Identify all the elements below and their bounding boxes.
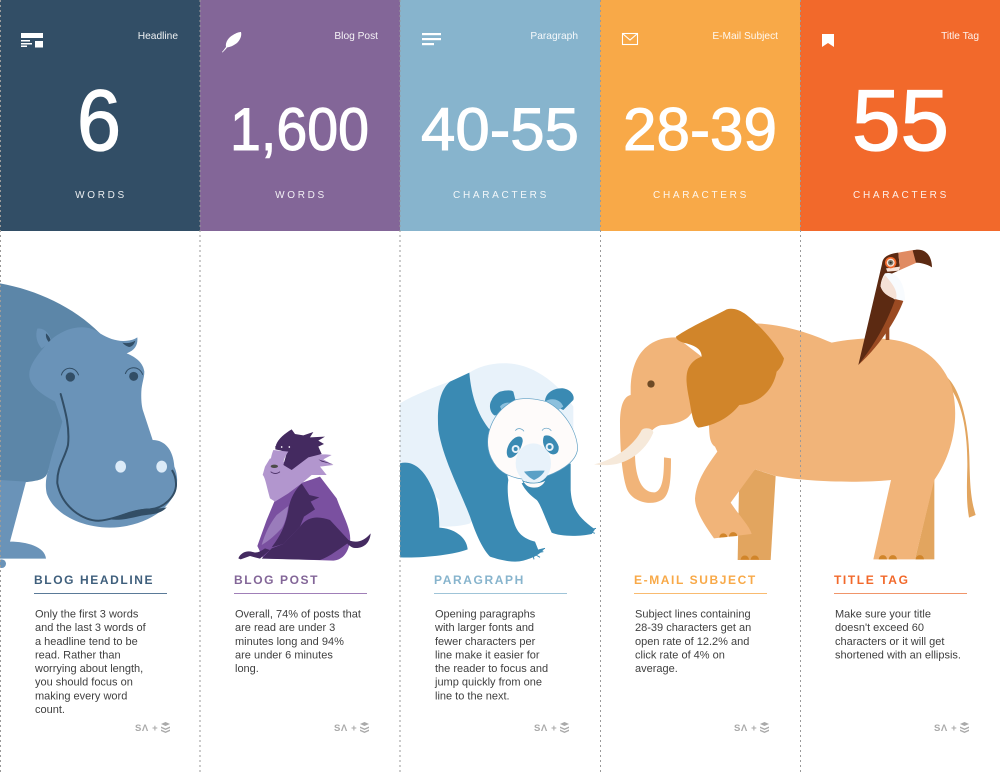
label: e-mail subject: E-Mail Subject	[712, 31, 778, 42]
heading: paragraph: PARAGRAPH	[434, 573, 525, 587]
body: paragraph: fewer characters per	[435, 636, 536, 648]
credit: column 1	[135, 722, 170, 734]
body: blog post: minutes long and 94%	[235, 636, 344, 648]
body: blog headline: and the last 3 words of	[35, 622, 147, 634]
body: blog headline: Only the first 3 words	[35, 608, 139, 620]
icon: bookmark	[822, 34, 834, 47]
body: e-mail subject: 28-39 characters get an	[635, 622, 751, 634]
number: 6: 6	[77, 73, 121, 169]
number: 1,600: 1,600	[230, 96, 369, 163]
panel: e-mail subject header	[600, 0, 800, 231]
credit: column 2: SΛ +	[334, 723, 357, 734]
unit: characters: CHARACTERS	[853, 190, 949, 201]
body: paragraph: with larger fonts and	[434, 622, 534, 634]
text block: paragraph	[434, 573, 567, 702]
heading: blog headline: BLOG HEADLINE	[34, 573, 154, 587]
unit: characters: CHARACTERS	[653, 190, 749, 201]
number: 55: 55	[852, 73, 949, 169]
body: title tag: shortened with an ellipsis.	[835, 650, 961, 662]
body: title tag: doesn't exceed 60	[835, 622, 924, 634]
body: e-mail subject: open rate of 12.2% and	[635, 636, 749, 648]
body: blog headline: count.	[35, 704, 65, 716]
illustration: panda	[400, 363, 596, 562]
heading: blog post: BLOG POST	[234, 573, 319, 587]
panel: headline header	[0, 0, 200, 231]
credit: column 4	[734, 722, 769, 734]
icon: paragraph lines	[422, 33, 441, 45]
number: 28-39: 28-39	[623, 96, 777, 163]
body: paragraph: line to the next.	[435, 690, 510, 702]
panel: paragraph header	[400, 0, 600, 231]
illustration: hippo	[0, 283, 177, 568]
heading: title tag: TITLE TAG	[834, 573, 910, 587]
body: blog headline: a headline tend to be	[35, 636, 138, 648]
credit: column 5	[934, 722, 969, 734]
body: paragraph: jump quickly from one	[434, 676, 542, 688]
body: e-mail subject: click rate of 4% on	[635, 650, 725, 662]
text block: title tag	[834, 573, 967, 662]
text block: e-mail subject	[634, 573, 767, 675]
label: title tag: Title Tag	[941, 31, 979, 42]
body: e-mail subject: average.	[635, 663, 678, 675]
unit: words: WORDS	[75, 190, 127, 201]
icon: envelope	[622, 34, 638, 44]
panel: blog post header	[200, 0, 400, 231]
panel: title tag header	[800, 0, 1000, 231]
text block: blog post	[234, 573, 367, 675]
body: title tag: characters or it will get	[835, 636, 944, 648]
body: title tag: Make sure your title	[835, 608, 931, 620]
icon: headline layout	[21, 33, 43, 48]
unit: characters: CHARACTERS	[453, 190, 549, 201]
credit: column 5: SΛ +	[934, 723, 957, 734]
body: e-mail subject: Subject lines containing	[635, 608, 751, 620]
label: blog post: Blog Post	[334, 31, 378, 42]
number: 40-55: 40-55	[421, 96, 579, 163]
body: blog post: long.	[235, 663, 259, 675]
body: paragraph: the reader to focus and	[435, 663, 548, 675]
illustration: monkey	[238, 429, 371, 561]
body: blog headline: read. Rather than	[35, 650, 121, 662]
illustration: elephant	[594, 309, 976, 560]
credit: column 3: SΛ +	[534, 723, 557, 734]
body: blog headline: making every word	[35, 690, 127, 702]
body: blog post: Overall, 74% of posts that	[235, 608, 361, 620]
body: paragraph: Opening paragraphs	[435, 608, 536, 620]
credit: column 1: SΛ +	[135, 723, 158, 734]
icon: feather	[222, 32, 241, 52]
label: headline: Headline	[138, 31, 178, 42]
label: paragraph: Paragraph	[530, 31, 578, 42]
credit: column 2	[334, 722, 369, 734]
body: blog headline: you should focus on	[35, 676, 133, 688]
credit: column 3	[534, 722, 569, 734]
unit: words: WORDS	[275, 190, 327, 201]
credit: column 4: SΛ +	[734, 723, 757, 734]
text block: blog headline	[34, 573, 167, 716]
illustration: toucan	[858, 250, 932, 365]
body: blog headline: worrying about length,	[34, 663, 143, 675]
body: blog post: are under 6 minutes	[235, 650, 333, 662]
body: paragraph: line make it easier for	[435, 650, 540, 662]
heading: e-mail subject: E-MAIL SUBJECT	[634, 573, 757, 587]
body: blog post: are read are under 3	[235, 622, 335, 634]
